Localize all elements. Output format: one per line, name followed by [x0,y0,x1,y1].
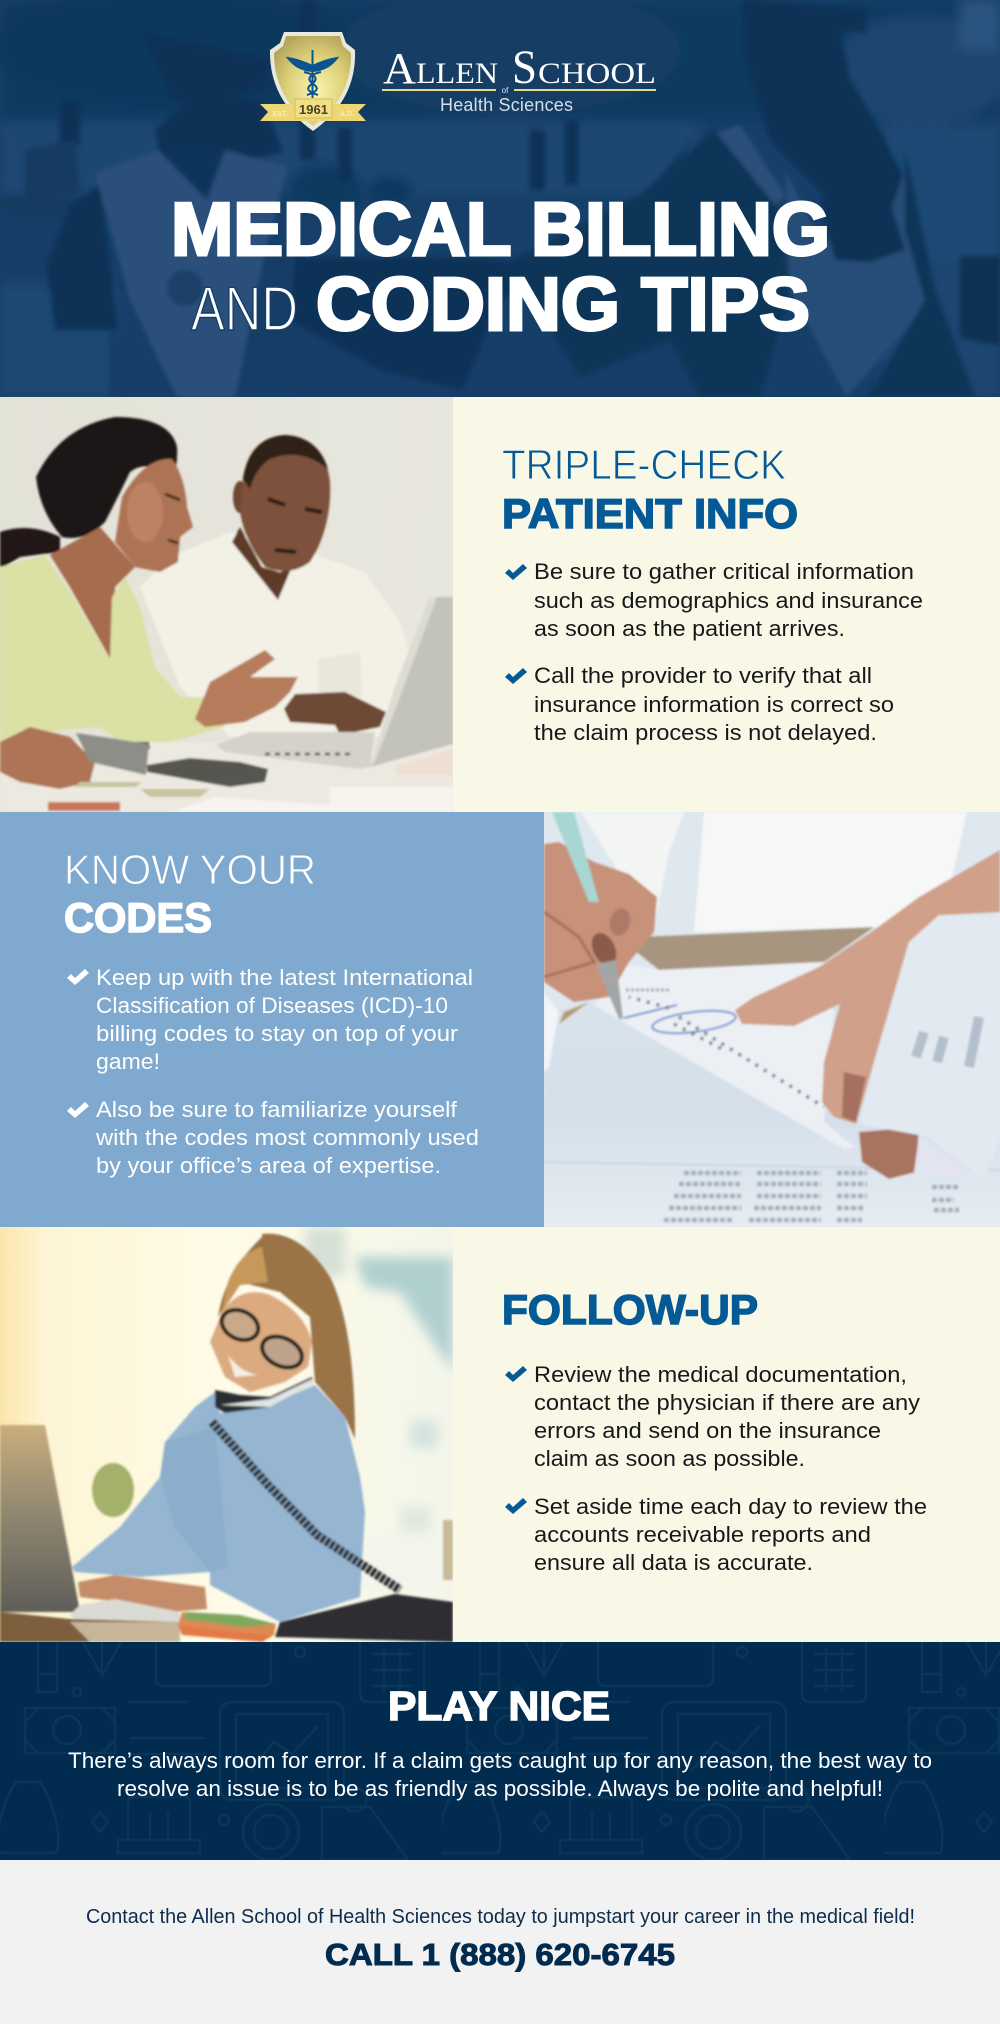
bullet text: game! [96,1049,160,1074]
text block: know your codes [64,846,479,1178]
panel: header background photo [0,0,1000,397]
icon: check mark [505,1366,527,1382]
panel: triple-check patient info background [453,397,1000,812]
bullet text: Call the provider to verify that all [534,663,872,688]
icon: check mark [67,1102,89,1118]
icon: check mark [67,969,89,985]
bullet text: billing codes to stay on top of your [96,1021,458,1046]
bullet text [96,965,473,1074]
heading [64,846,316,941]
bullet text: insurance information is correct so [534,692,894,717]
panel: play nice [0,1642,1000,1860]
bullet text: Be sure to gather critical information [534,559,914,584]
bullet text [95,1097,479,1178]
heading: play nice: PLAY NICE [388,1683,610,1729]
logo wordmark: of [502,86,509,95]
bullet text: as soon as the patient arrives. [534,616,845,641]
heading: TRIPLE-CHECK [502,441,786,488]
left graduate [182,98,237,104]
text block: play nice body [68,1748,932,1801]
bullet text: by your office’s area of expertise. [96,1153,441,1178]
bullet text [534,559,923,641]
heading: PATIENT INFO [502,490,798,537]
icon: gold shield [270,32,355,131]
panel: know your codes background [0,812,544,1227]
photo: woman and man at a laptop [0,397,453,812]
panel: follow-up background [453,1227,1000,1642]
bullet text: Set aside time each day to review the [534,1494,927,1519]
icon: ribbon with 1961 [260,99,366,121]
photo: woman on phone at laptop [0,1227,453,1642]
tree trunks, bench and bin [60,0,578,190]
icon: check mark [505,564,527,580]
bullet text: Keep up with the latest International [96,965,473,990]
bullet text: ensure all data is accurate. [534,1550,813,1575]
graduate's sleeve [290,130,700,390]
title [171,187,830,346]
text block: play nice body: There’s always room for error. If a claim gets caught up for any reason, the best way to [68,1748,932,1773]
logo: Allen School of Health Sciences [260,32,656,131]
logo wordmark: S [512,41,537,94]
bullet text: accounts receivable reports and [534,1522,871,1547]
phone number: CALL 1 (888) 620-6745 [325,1937,675,1972]
photo: hands with pen and receipt [544,812,1000,1227]
text block: play nice body: resolve an issue is to be as friendly as possible. Always be polite and helpful! [117,1776,883,1801]
bullet text: Review the medical documentation, [534,1362,907,1387]
logo wordmark: Health Sciences [440,95,573,115]
icon: check mark [505,1498,527,1514]
heading: KNOW YOUR [64,846,316,893]
bullet text [534,663,894,745]
bullet text: Also be sure to familiarize yourself [96,1097,458,1122]
text block: follow-up [502,1286,927,1575]
icon: ribbon with 1961: EST. [273,111,287,118]
heading: FOLLOW-UP [502,1286,758,1333]
bullet text [534,1362,920,1471]
bullet text: errors and send on the insurance [534,1418,881,1443]
text block: triple-check patient info [502,441,923,745]
logo wordmark: A [383,44,416,93]
logo wordmark [382,41,656,115]
heading [502,441,798,537]
bullet text: Classification of Diseases (ICD)-10 [96,993,448,1018]
icon: ribbon with 1961: 1961 [299,102,328,117]
icon: check mark [505,668,527,684]
bullet text: with the codes most commonly used [95,1125,479,1150]
logo wordmark: LLEN [416,57,498,90]
bullet text: claim as soon as possible. [534,1446,805,1471]
title: MEDICAL BILLING [171,187,830,271]
bullet text: contact the physician if there are any [534,1390,920,1415]
bullet text: such as demographics and insurance [534,588,923,613]
bullet text: the claim process is not delayed. [534,720,877,745]
logo wordmark: CHOOL [538,57,656,90]
panel: contact footer [0,1860,1000,2024]
contact text: Contact the Allen School of Health Sciences today to jumpstart your career in the medical field! [86,1906,915,1928]
title: AND [191,275,298,344]
right graduate [743,0,904,205]
icon: ribbon with 1961: A.D. [340,111,354,118]
heading: CODES [64,894,212,941]
bullet text [534,1494,927,1575]
title: CODING TIPS [316,262,810,346]
